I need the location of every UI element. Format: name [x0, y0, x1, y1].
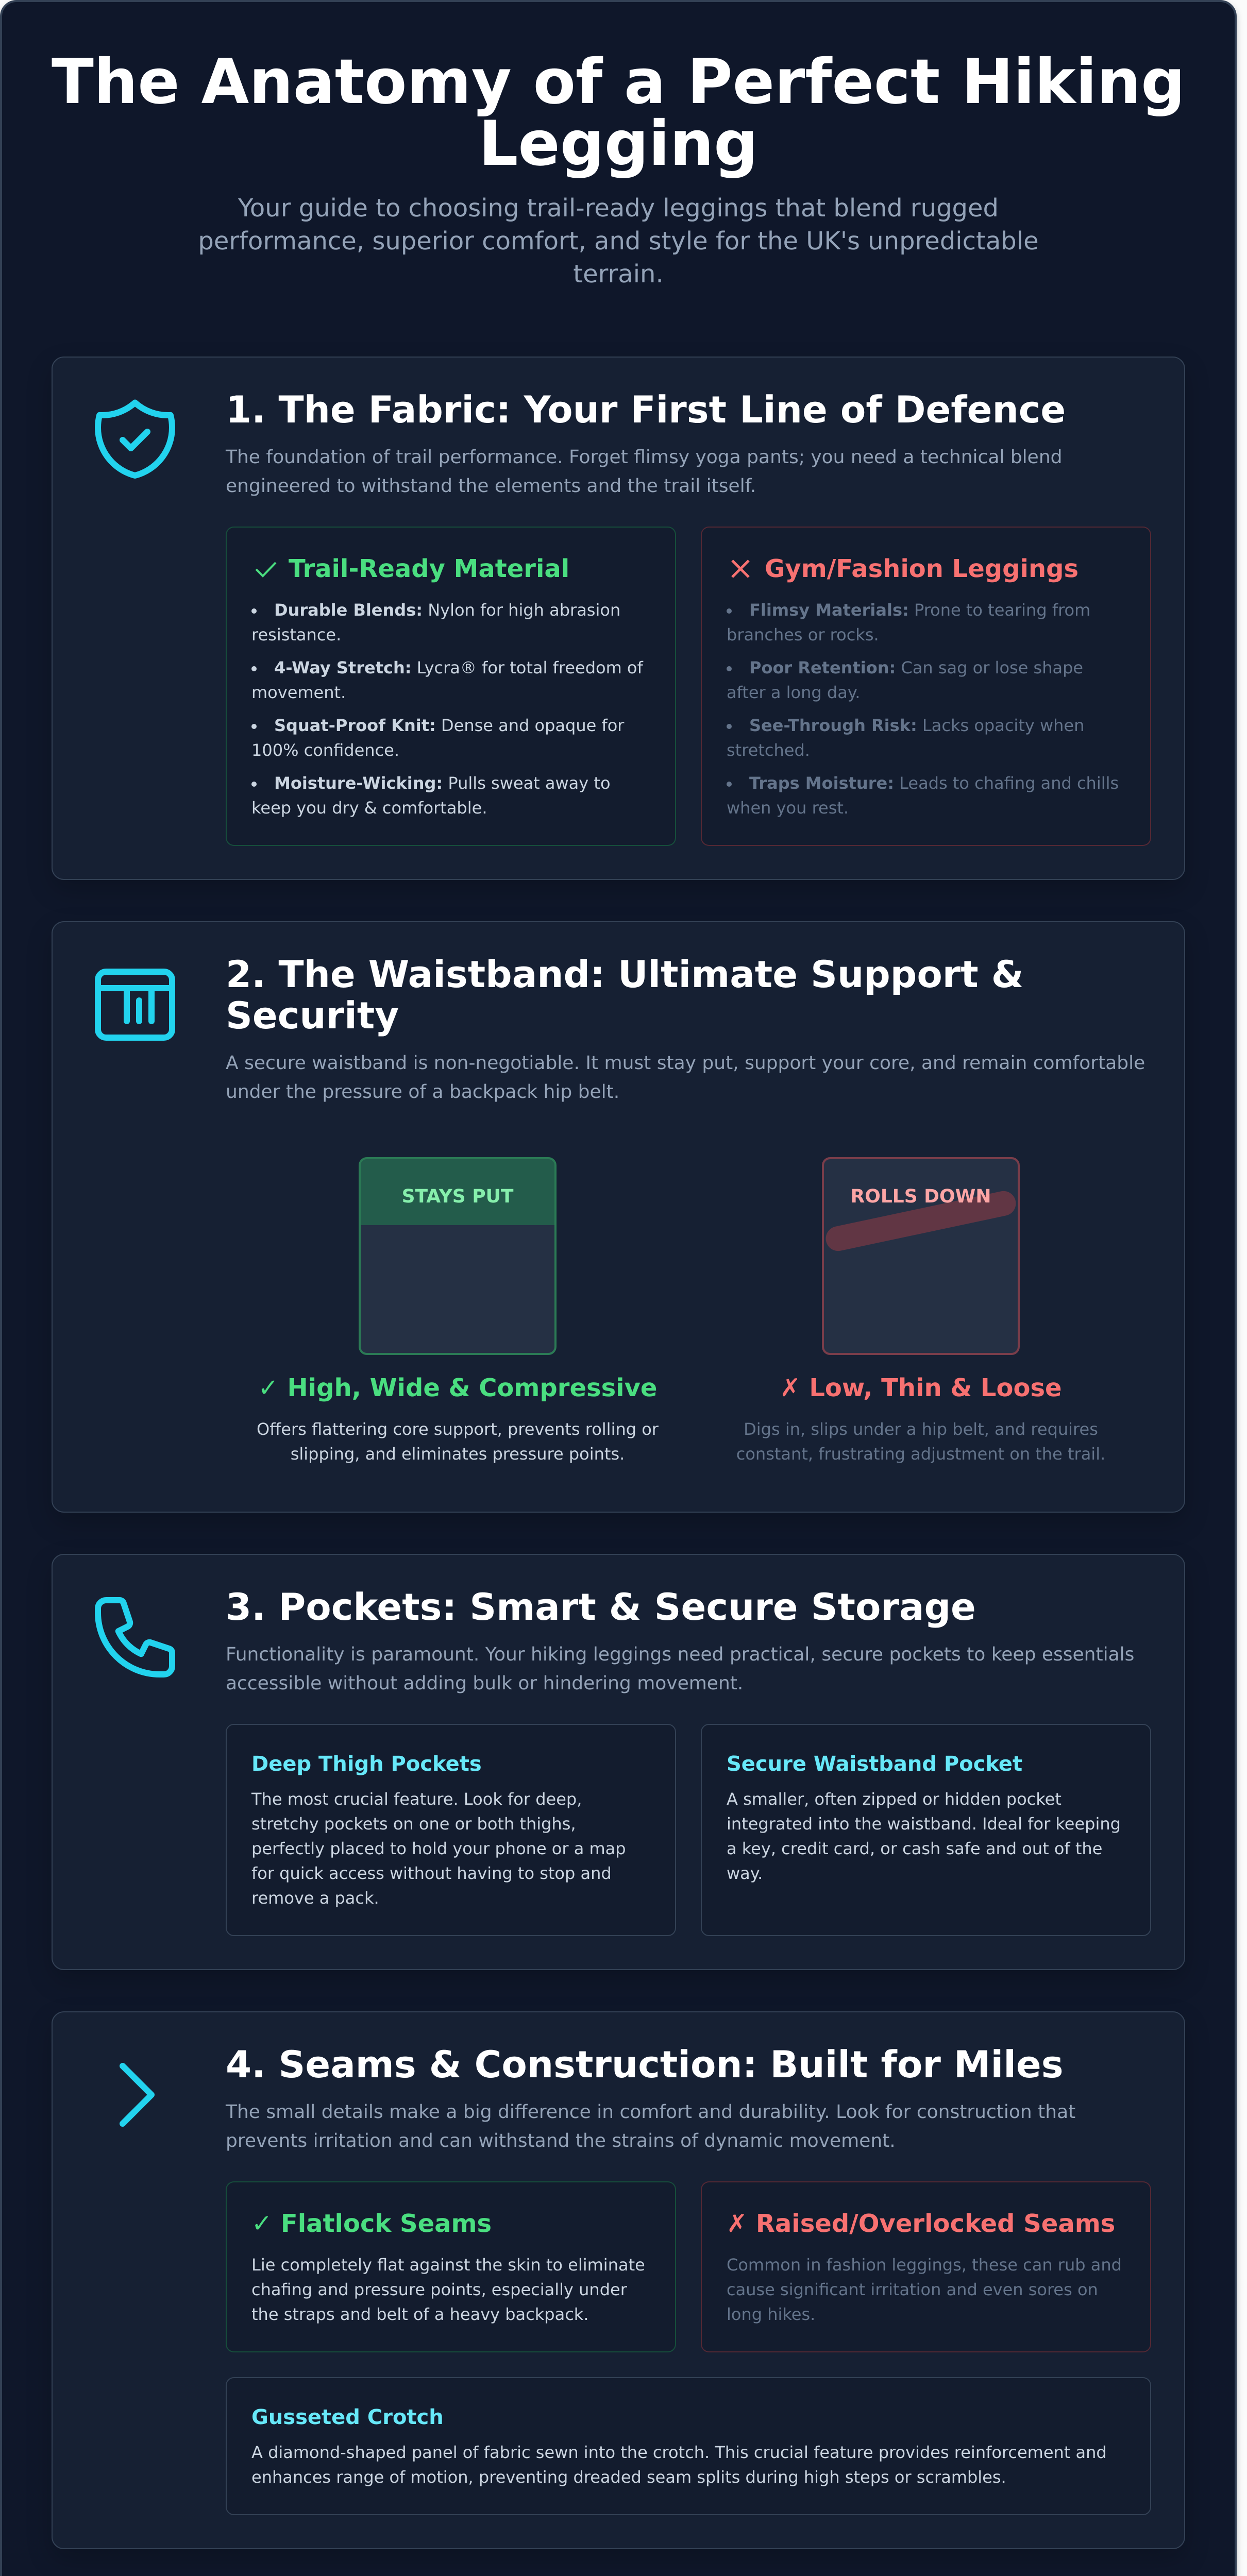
subtitle: terrain.	[573, 260, 664, 289]
subtitle	[198, 194, 1039, 289]
card text: thigh	[251, 1787, 650, 1910]
list: bad fabric features: Poor Retention: Can sag or lose shape	[749, 658, 1083, 677]
card text: flatlock: chafing and pressure points, especially under	[251, 2280, 627, 2299]
icon: phone	[86, 1588, 184, 1687]
section 4 content	[226, 2045, 1151, 2515]
card: gym/fashion leggings	[701, 527, 1151, 846]
waistband comparison	[226, 1108, 1151, 1479]
icon: shield check	[95, 400, 175, 479]
caption text: bad	[694, 1417, 1148, 1466]
card heading: waistband pocket: Secure Waistband Pocket	[727, 1752, 1022, 1776]
icon: waistband	[95, 969, 175, 1041]
list: bad fabric features: after a long day.	[727, 683, 860, 702]
card text: gusset	[251, 2440, 1125, 2489]
list: good fabric features: keep you dry & comfortable.	[251, 798, 487, 818]
card heading: flatlock: ✓ Flatlock Seams	[251, 2209, 492, 2238]
caption text: bad: Digs in, slips under a hip belt, and requires	[744, 1419, 1098, 1439]
card text: thigh: for quick access without having to stop and	[251, 1863, 612, 1883]
card text: thigh: perfectly placed to hold your phone or a map	[251, 1839, 626, 1858]
list: good fabric features: Durable Blends: Nylon for high abrasion	[274, 600, 620, 620]
card heading: raised: ✗ Raised/Overlocked Seams	[727, 2209, 1115, 2238]
card: deep thigh pockets	[226, 1724, 676, 1936]
text: seams intro	[226, 2098, 1151, 2156]
card text: raised: Common in fashion leggings, these can rub and	[727, 2255, 1122, 2275]
seam comparison cards	[226, 2181, 1151, 2352]
card text: thigh: The most crucial feature. Look for deep,	[251, 1789, 582, 1809]
list: good fabric features: Moisture-Wicking: Pulls sweat away to	[274, 773, 611, 793]
card text: waistband pocket: a key, credit card, or cash safe and out of the	[727, 1839, 1102, 1858]
heading: seams: 4. Seams & Construction: Built for Miles	[226, 2043, 1064, 2086]
list: good fabric features: Squat-Proof Knit: Dense and opaque for	[274, 716, 624, 735]
list: good fabric features: 4-Way Stretch: Lycra® for total freedom of	[274, 658, 643, 677]
text: waistband intro: A secure waistband is non-negotiable. It must stay put, support your core, and remain comfortable	[226, 1053, 1145, 1074]
card: trail-ready material	[226, 527, 676, 846]
title: Legging	[479, 108, 758, 180]
pocket cards	[226, 1724, 1151, 1936]
section 2 content	[226, 953, 1145, 1464]
icon: chevron	[86, 2045, 184, 2144]
card text: flatlock	[251, 2252, 650, 2327]
panel: section 1 fabric	[52, 357, 1185, 880]
list: bad fabric features: See-Through Risk: Lacks opacity when	[749, 716, 1084, 735]
card text: raised	[727, 2252, 1125, 2327]
list: bad fabric features: Flimsy Materials: Prone to tearing from	[749, 600, 1090, 620]
subtitle: Your guide to choosing trail-ready leggings that blend rugged	[238, 194, 999, 223]
diagram: rolls down	[822, 1157, 1020, 1355]
band: green waistband	[361, 1159, 554, 1225]
card text: raised: long hikes.	[727, 2304, 815, 2324]
list: bad fabric features: stretched.	[727, 740, 810, 760]
panel: section 4 seams	[52, 2011, 1185, 2549]
list: bad fabric features: branches or rocks.	[727, 625, 879, 645]
list: good fabric features: resistance.	[251, 625, 341, 645]
caption text: good: slipping, and eliminates pressure points.	[291, 1444, 625, 1464]
heading: waistband: 2. The Waistband: Ultimate Support &	[226, 953, 1024, 996]
card text: flatlock: the straps and belt of a heavy backpack.	[251, 2304, 588, 2324]
card text: raised: cause significant irritation and even sores on	[727, 2280, 1098, 2299]
text: seams intro: The small details make a big difference in comfort and durability. Look for construction that	[226, 2102, 1075, 2123]
card: flatlock seams	[226, 2181, 676, 2352]
card text: waistband pocket: integrated into the waistband. Ideal for keeping	[727, 1814, 1121, 1834]
caption text: good	[231, 1417, 684, 1466]
list: bad fabric features: Traps Moisture: Leads to chafing and chills	[749, 773, 1119, 793]
card heading: gusset: Gusseted Crotch	[251, 2405, 444, 2429]
card text: flatlock: Lie completely flat against the skin to eliminate	[251, 2255, 645, 2275]
card text: waistband pocket: A smaller, often zipped or hidden pocket	[727, 1789, 1061, 1809]
diagram: stays put	[359, 1157, 557, 1355]
text: waistband intro	[226, 1049, 1151, 1107]
comparison cards	[226, 527, 1151, 846]
title	[52, 46, 1185, 180]
heading: pockets: 3. Pockets: Smart & Secure Storage	[226, 1585, 976, 1629]
panel: section 2 waistband	[52, 921, 1185, 1513]
section 3 content	[226, 1588, 1151, 1936]
panel: section 3 pockets	[52, 1554, 1185, 1970]
heading: fabric: 1. The Fabric: Your First Line of Defence	[226, 388, 1066, 431]
card heading: gym/fashion: Gym/Fashion Leggings	[765, 554, 1079, 583]
caption heading: bad: ✗ Low, Thin & Loose	[780, 1374, 1062, 1402]
list: bad fabric features	[727, 600, 1119, 818]
text: fabric intro: The foundation of trail performance. Forget flimsy yoga pants; you need a technical blend	[226, 447, 1063, 468]
text: seams intro: prevents irritation and can withstand the strains of dynamic movement.	[226, 2130, 896, 2151]
text: fabric intro: engineered to withstand the elements and the trail itself.	[226, 476, 756, 497]
card: gusseted crotch	[226, 2377, 1151, 2515]
caption text: good: Offers flattering core support, prevents rolling or	[257, 1419, 659, 1439]
list: bad fabric features: when you rest.	[727, 798, 849, 818]
caption: high wide compressive	[231, 1371, 684, 1466]
card text: thigh: remove a pack.	[251, 1888, 379, 1908]
card text: waistband pocket	[727, 1787, 1125, 1886]
card: raised seams	[701, 2181, 1151, 2352]
caption text: bad: constant, frustrating adjustment on the trail.	[736, 1444, 1105, 1464]
label: rolls down: ROLLS DOWN	[850, 1186, 991, 1207]
card: secure waistband pocket	[701, 1724, 1151, 1936]
caption: low thin loose	[694, 1371, 1148, 1466]
caption heading: good: ✓ High, Wide & Compressive	[258, 1374, 657, 1402]
list: good fabric features: 100% confidence.	[251, 740, 399, 760]
text: fabric intro	[226, 447, 1063, 497]
text: pockets intro: Functionality is paramount. Your hiking leggings need practical, secure pockets to keep essentials	[226, 1644, 1134, 1665]
section 1 content	[226, 388, 1151, 846]
card text: waistband pocket: way.	[727, 1863, 763, 1883]
text: pockets intro	[226, 1640, 1151, 1698]
title: The Anatomy of a Perfect Hiking	[52, 46, 1185, 118]
card text: gusset: A diamond-shaped panel of fabric sewn into the crotch. This crucial feature provides reinforcement and	[251, 2443, 1107, 2462]
card text: gusset: enhances range of motion, preventing dreaded seam splits during high steps or scrambles.	[251, 2467, 1006, 2487]
card heading: thigh: Deep Thigh Pockets	[251, 1752, 482, 1776]
list: good fabric features: movement.	[251, 683, 346, 702]
text: waistband intro: under the pressure of a backpack hip belt.	[226, 1081, 619, 1103]
list: good fabric features	[251, 600, 643, 818]
card text: thigh: stretchy pockets on one or both thighs,	[251, 1814, 576, 1834]
text: pockets intro: accessible without adding bulk or hindering movement.	[226, 1673, 743, 1694]
heading: waistband	[226, 953, 1024, 1037]
band: rolled waistband	[823, 1189, 1018, 1253]
heading: waistband: Security	[226, 994, 399, 1037]
subtitle: performance, superior comfort, and style for the UK's unpredictable	[198, 227, 1039, 256]
label: stays put: STAYS PUT	[402, 1186, 513, 1207]
card heading: trail-ready: Trail-Ready Material	[289, 554, 569, 583]
